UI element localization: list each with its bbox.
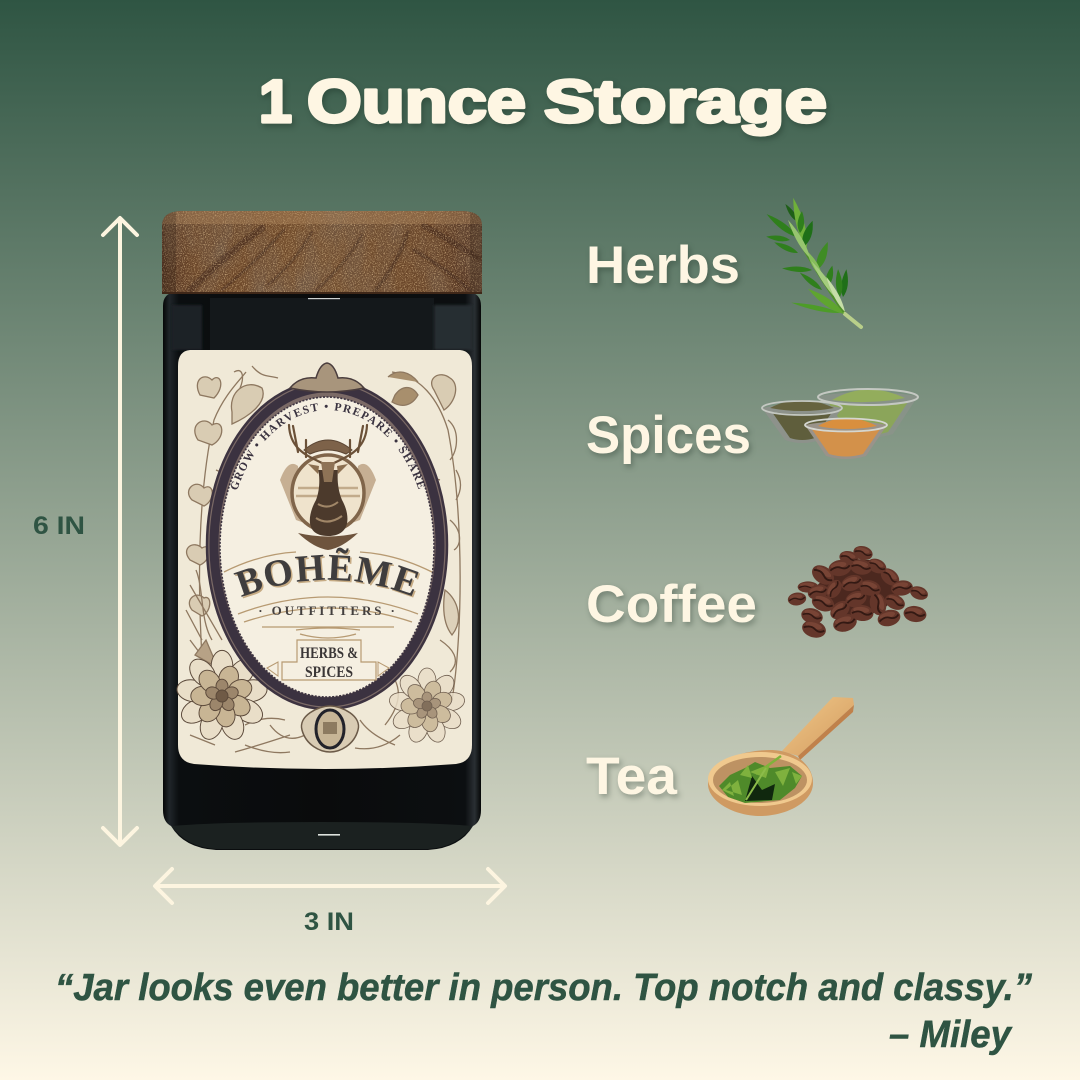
motto: GROW • HARVEST • PREPARE • SHARE [231,402,425,490]
banner ornaments [224,552,432,638]
label paper [178,350,472,769]
label: tea: Tea [586,747,678,806]
icon: wooden spoon with tea [708,697,854,816]
tea leaves [719,756,802,803]
icon: spice bowls [762,389,918,459]
herbs and spices badge: SPICES [305,664,353,681]
wooden lid [162,211,482,295]
outfitters: · OUTFITTERS · [258,603,398,618]
herbs and spices badge: HERBS & [300,645,358,662]
botanical sprays, right [355,372,460,749]
left peony [175,650,269,743]
dark herb bowl [762,400,842,443]
jar glass body [163,292,481,850]
quote attribution: – Miley [889,1014,1013,1056]
arrow: jar height [103,218,137,845]
right peony [388,668,466,745]
width label: 3 IN [304,908,354,936]
label [176,350,472,769]
icon: rosemary sprig [765,197,861,327]
title: Storage [544,68,827,135]
title [259,68,827,135]
bottom medallion [301,706,359,752]
jar [162,211,482,850]
top crest [290,363,364,392]
spoon handle [782,697,854,756]
title: 1 [259,68,292,135]
customer quote: “Jar looks even better in person. Top notch and classy.” [55,967,1032,1009]
label: herbs: Herbs [586,236,740,295]
label: spices: Spices [586,406,751,465]
brand name: BOHẼME [235,550,420,598]
botanical sprays, left [186,366,305,753]
herbs and spices badge [267,640,389,681]
spoon bowl [708,750,813,816]
icon: coffee beans [787,544,930,640]
title: Ounce [307,68,526,135]
glass reflections [172,298,472,849]
stag cartouche [280,425,376,550]
brand name: BOHẼME [234,548,419,597]
arrow: jar width [155,869,505,903]
label: coffee: Coffee [586,575,757,634]
orange powder bowl [805,418,887,459]
oval frame [207,381,447,709]
green powder bowl [818,389,918,438]
height label: 6 IN [33,512,85,540]
